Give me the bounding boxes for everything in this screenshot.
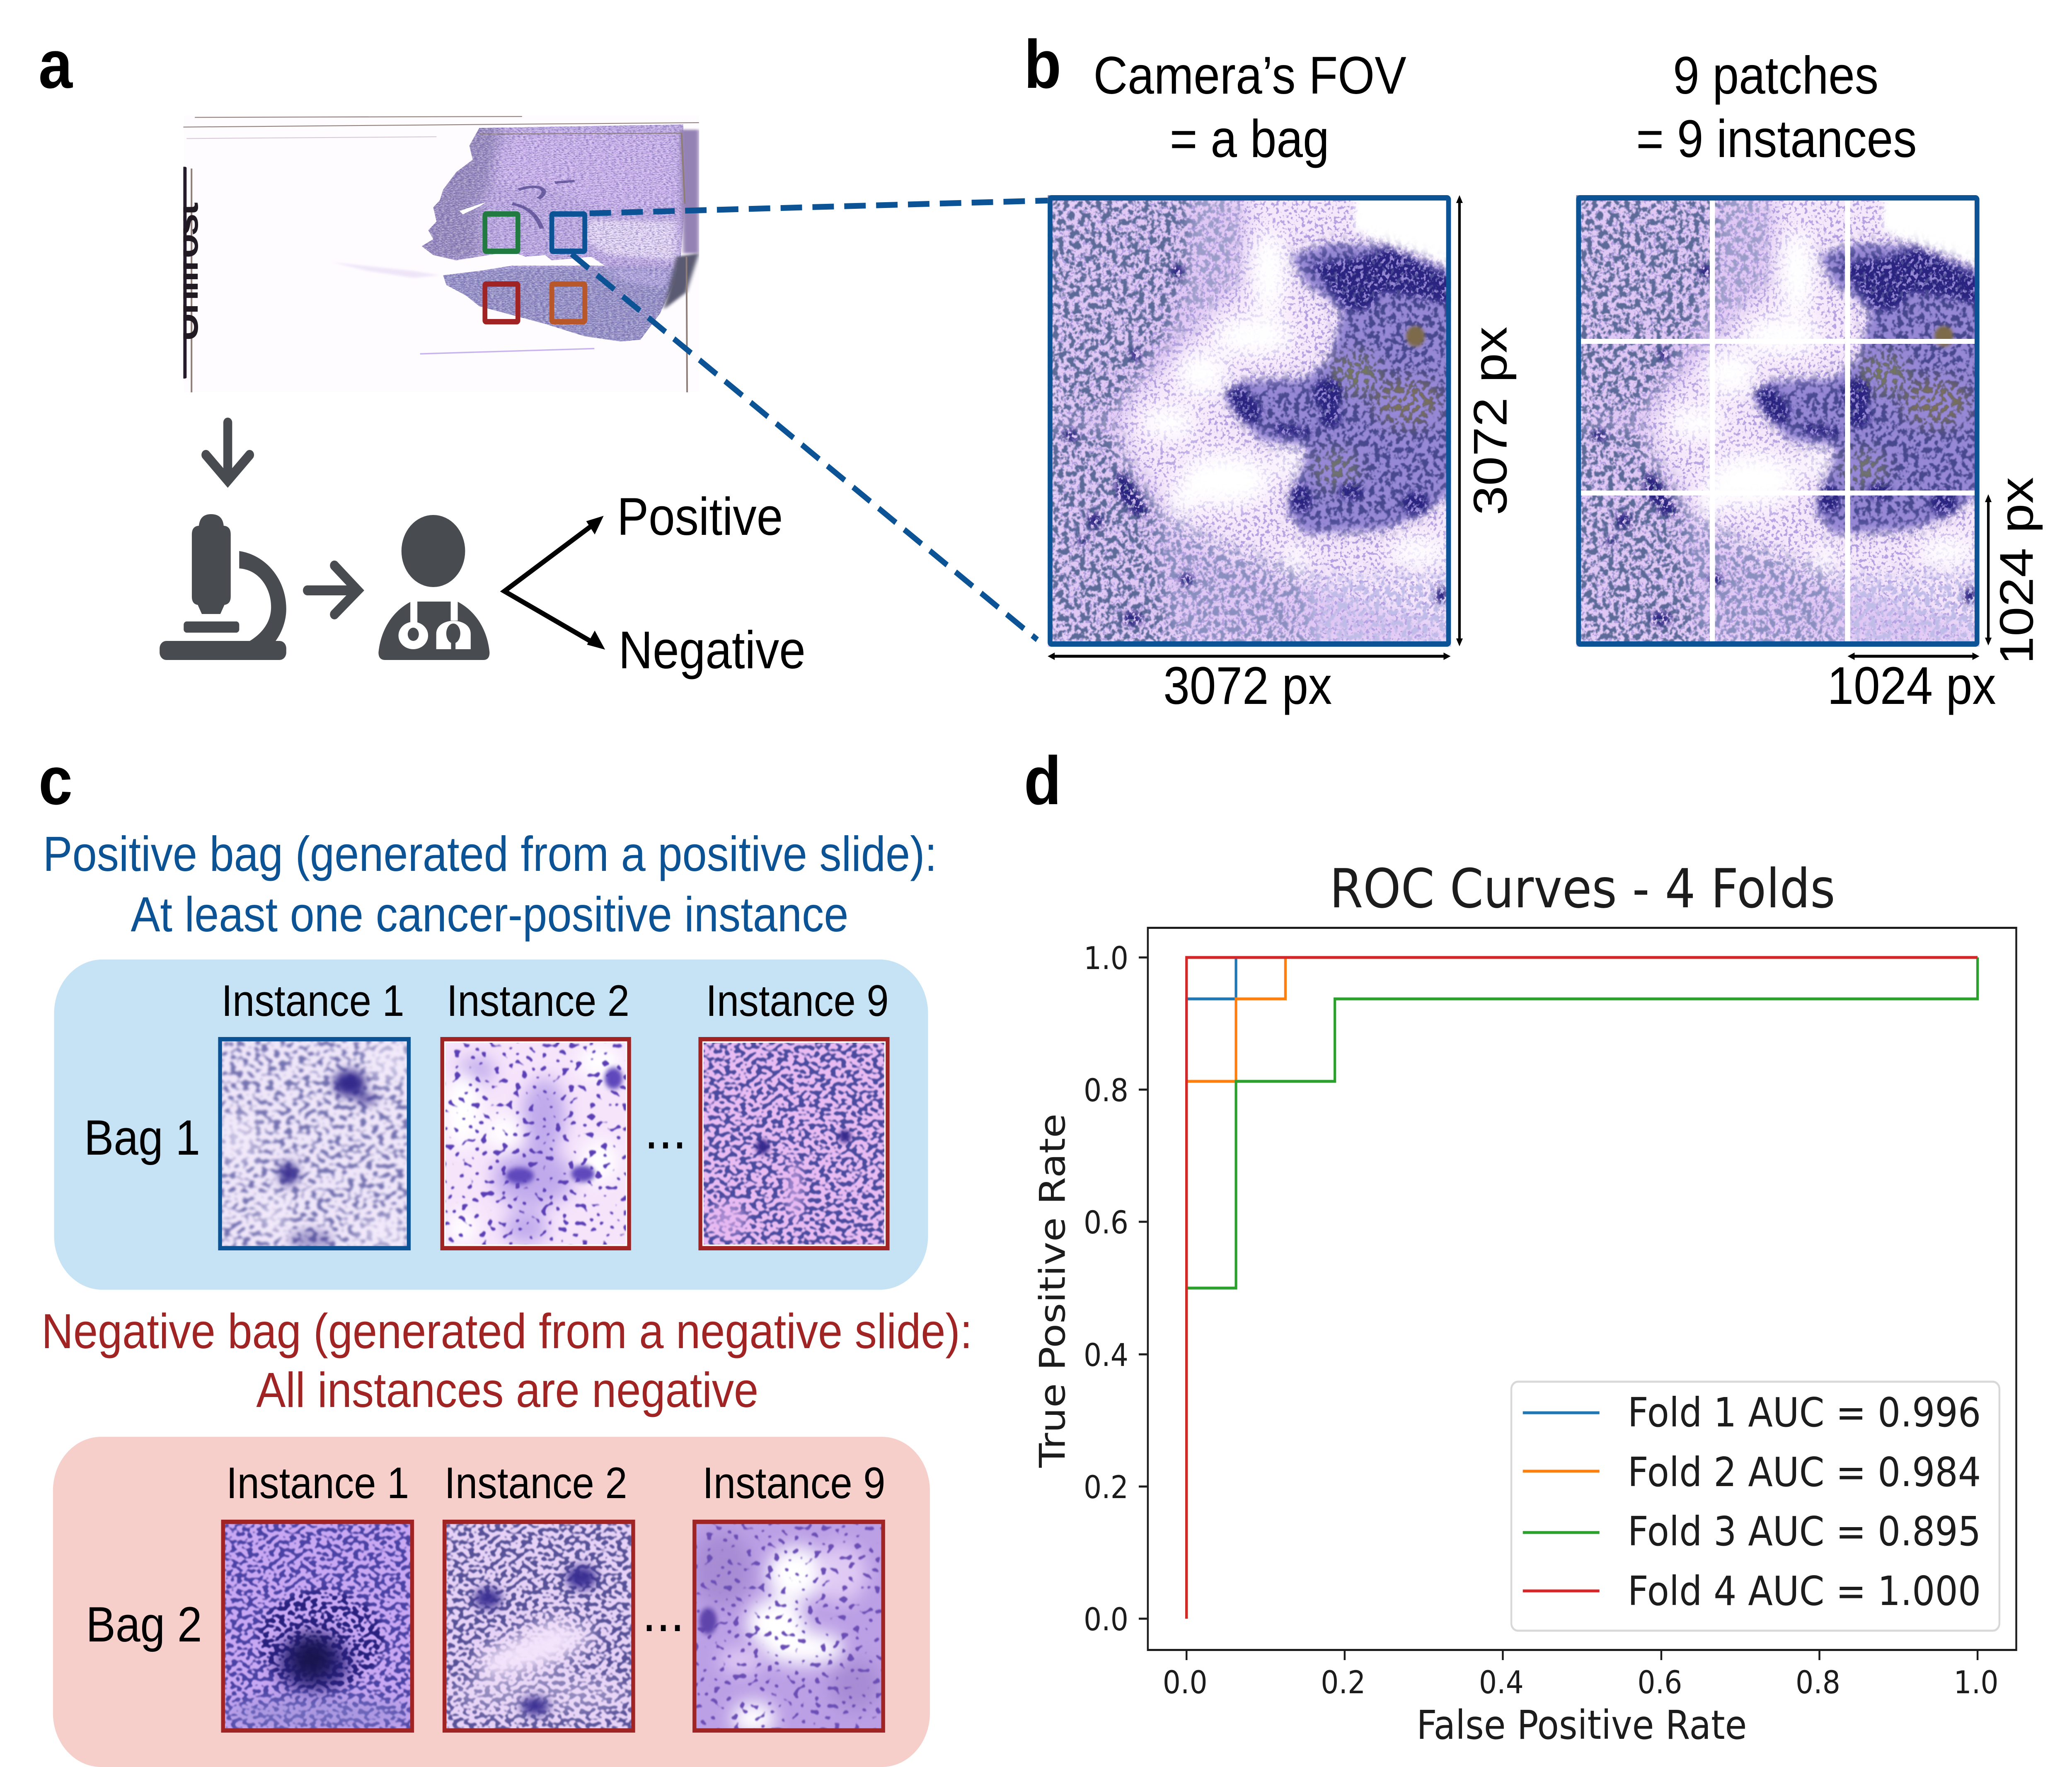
label: Instance 9: Instance 9 (702, 1458, 885, 1508)
x axis ticks: 0.4 (1479, 1664, 1524, 1701)
dashed zoom line: bottom (571, 254, 1037, 640)
caption: positive bag (43, 826, 937, 942)
FOV square: blue (552, 214, 585, 251)
label: Instance 2: Instance 2 (444, 1458, 627, 1508)
y axis ticks: 0.2 (1084, 1469, 1128, 1506)
x axis ticks: 0.0 (1163, 1664, 1208, 1701)
legend: Fold 1 AUC = 0.996 (1628, 1389, 1981, 1436)
dimension arrow: FOV width (1048, 653, 1450, 660)
curve: Fold 3 (1186, 957, 1978, 1619)
icon: right arrow (307, 566, 358, 614)
dimension text: 3072 px vertical: 3072 px (1464, 326, 1517, 515)
dimension arrow: FOV height (1456, 195, 1463, 646)
patch: Bag 2 instance 1 (221, 1520, 414, 1733)
label: Positive: Positive (617, 487, 783, 546)
panel label a: a (39, 26, 73, 103)
caption: negative bag: Negative bag (generated from a negative slide): (41, 1303, 972, 1358)
plot frame (1148, 928, 2016, 1650)
icon: microscope (160, 514, 286, 660)
label: Instance 9: Instance 9 (706, 976, 889, 1025)
caption: positive bag: At least one cancer-positive instance (131, 887, 848, 942)
y axis ticks (1084, 940, 1147, 1638)
x axis ticks: 1.0 (1954, 1664, 1999, 1701)
decision arrows (504, 516, 605, 650)
patch: Bag 1 instance 2 (441, 1037, 631, 1250)
heading: 9 patches = 9 instances: 9 patches (1673, 46, 1878, 105)
whole slide scan (166, 116, 702, 392)
panel label d: d (1024, 742, 1061, 819)
label: Bag 1: Bag 1 (84, 1110, 200, 1165)
patch: Bag 1 instance 1 (218, 1037, 411, 1250)
heading: Camera's FOV = a bag: Camera’s FOV (1094, 46, 1406, 105)
FOV square: green (485, 214, 518, 251)
dimension arrow: patch height (1985, 494, 1992, 645)
y axis ticks: 0.6 (1084, 1204, 1128, 1241)
x axis label: False Positive Rate (1416, 1702, 1747, 1748)
FOV split into 9 patches (1566, 184, 1990, 659)
curve: Fold 2 (1186, 957, 1978, 1619)
heading: 9 patches = 9 instances: = 9 instances (1636, 109, 1917, 168)
dimension arrow: patch width (1847, 653, 1980, 660)
panel label b: b (1024, 26, 1061, 103)
FOV image (1037, 184, 1462, 659)
label: Bag 2: Bag 2 (86, 1597, 202, 1652)
dimension text: 3072 px horizontal: 3072 px (1163, 656, 1332, 715)
FOV square: orange (552, 284, 585, 321)
x axis ticks: 0.2 (1321, 1664, 1365, 1701)
label: Negative: Negative (618, 620, 806, 679)
ellipsis: ... (642, 1580, 685, 1644)
dimension text: 1024 px vertical: 1024 px (1990, 477, 2043, 666)
icon: down arrow (206, 423, 249, 481)
label: Instance 1: Instance 1 (226, 1458, 409, 1508)
x axis ticks (1163, 1651, 1999, 1701)
whole slide scan: Unifrost (166, 202, 206, 341)
caption: positive bag: Positive bag (generated from a positive slide): (43, 826, 937, 881)
y axis ticks: 0.0 (1084, 1601, 1128, 1638)
curve: Fold 4 (1186, 957, 1978, 1619)
x axis ticks: 0.8 (1796, 1664, 1840, 1701)
caption: negative bag: All instances are negative (256, 1362, 758, 1417)
legend: Fold 3 AUC = 0.895 (1628, 1508, 1981, 1555)
icon: doctor with stethoscope (378, 515, 489, 660)
legend: Fold 2 AUC = 0.984 (1628, 1448, 1981, 1496)
legend: Fold 4 AUC = 1.000 (1628, 1567, 1981, 1615)
patch: Bag 1 instance 9 (698, 1037, 890, 1250)
panel: Bag 2 (53, 1437, 930, 1767)
y axis ticks: 0.8 (1084, 1072, 1128, 1109)
x axis ticks: 0.6 (1637, 1664, 1682, 1701)
panel label c: c (39, 742, 73, 819)
caption: negative bag (41, 1303, 972, 1417)
FOV square: red (485, 284, 518, 321)
label: Instance 2: Instance 2 (447, 976, 629, 1025)
panel a: whole slide image with selected FOV squares (166, 116, 702, 392)
panel: Bag 1 (54, 960, 928, 1290)
chart title: ROC Curves - 4 Folds (1329, 858, 1835, 921)
y axis ticks: 0.4 (1084, 1337, 1128, 1373)
y axis label: True Positive Rate (1032, 1114, 1073, 1468)
legend (1511, 1382, 1999, 1631)
panel d: ROC chart (1032, 858, 2016, 1748)
patch: Bag 2 instance 2 (443, 1520, 635, 1733)
dashed zoom line: top (590, 201, 1048, 213)
heading: Camera's FOV = a bag (1094, 46, 1406, 168)
label: Instance 1: Instance 1 (221, 976, 404, 1025)
patch: Bag 2 instance 9 (692, 1520, 885, 1735)
heading: Camera's FOV = a bag: = a bag (1170, 109, 1329, 168)
y axis ticks: 1.0 (1084, 940, 1128, 977)
ellipsis: ... (644, 1097, 687, 1161)
dimension text: 1024 px horizontal: 1024 px (1828, 656, 1996, 715)
curve: Fold 1 (1186, 957, 1978, 1619)
heading: 9 patches = 9 instances (1636, 46, 1917, 168)
